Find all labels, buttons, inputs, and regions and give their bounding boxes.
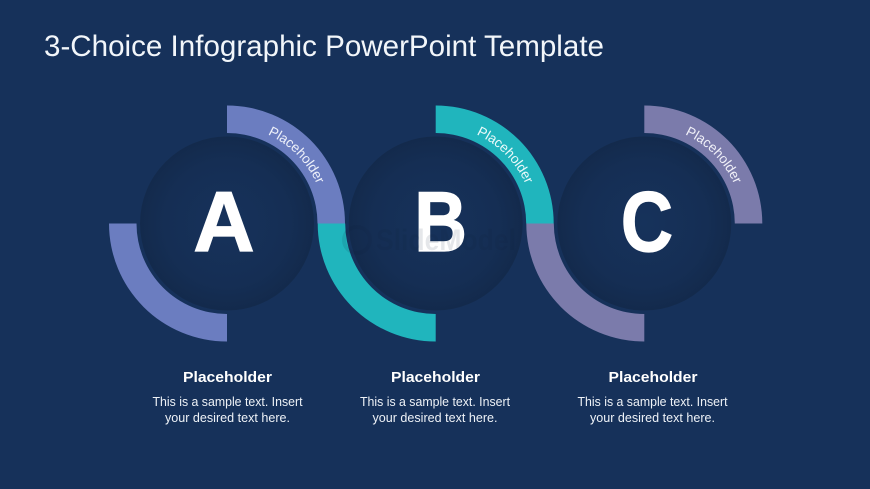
text block B: your desired text here. bbox=[372, 411, 498, 425]
arc B upper with label bbox=[436, 106, 554, 224]
text block C: Placeholder bbox=[608, 369, 698, 386]
disc B: B bbox=[414, 174, 467, 269]
text block A: This is a sample text. Insert bbox=[152, 395, 303, 409]
text block C: your desired text here. bbox=[590, 411, 715, 425]
text block C bbox=[578, 369, 728, 425]
disc C: C bbox=[621, 174, 673, 269]
disc C bbox=[557, 136, 731, 310]
arc C upper with label bbox=[644, 106, 762, 224]
arc A upper with label bbox=[227, 106, 345, 224]
arc C upper with label: Placeholder bbox=[686, 126, 740, 182]
watermark: SlideModel bbox=[376, 224, 516, 257]
text block A bbox=[152, 369, 303, 425]
disc B bbox=[349, 136, 523, 310]
title: 3-Choice Infographic PowerPoint Template bbox=[44, 30, 604, 63]
text block B: This is a sample text. Insert bbox=[360, 395, 511, 409]
text block C: This is a sample text. Insert bbox=[578, 395, 728, 409]
disc A: A bbox=[193, 175, 255, 270]
text block B bbox=[360, 369, 511, 425]
arc B lower bbox=[318, 224, 436, 342]
arc A lower bbox=[109, 224, 227, 342]
disc A bbox=[140, 136, 314, 310]
text block B: Placeholder bbox=[391, 369, 480, 386]
arc A upper with label: Placeholder bbox=[268, 126, 324, 182]
arc C lower bbox=[526, 224, 644, 342]
text block A: Placeholder bbox=[183, 369, 272, 386]
arc B upper with label: Placeholder bbox=[477, 126, 532, 182]
text block A: your desired text here. bbox=[165, 411, 290, 425]
